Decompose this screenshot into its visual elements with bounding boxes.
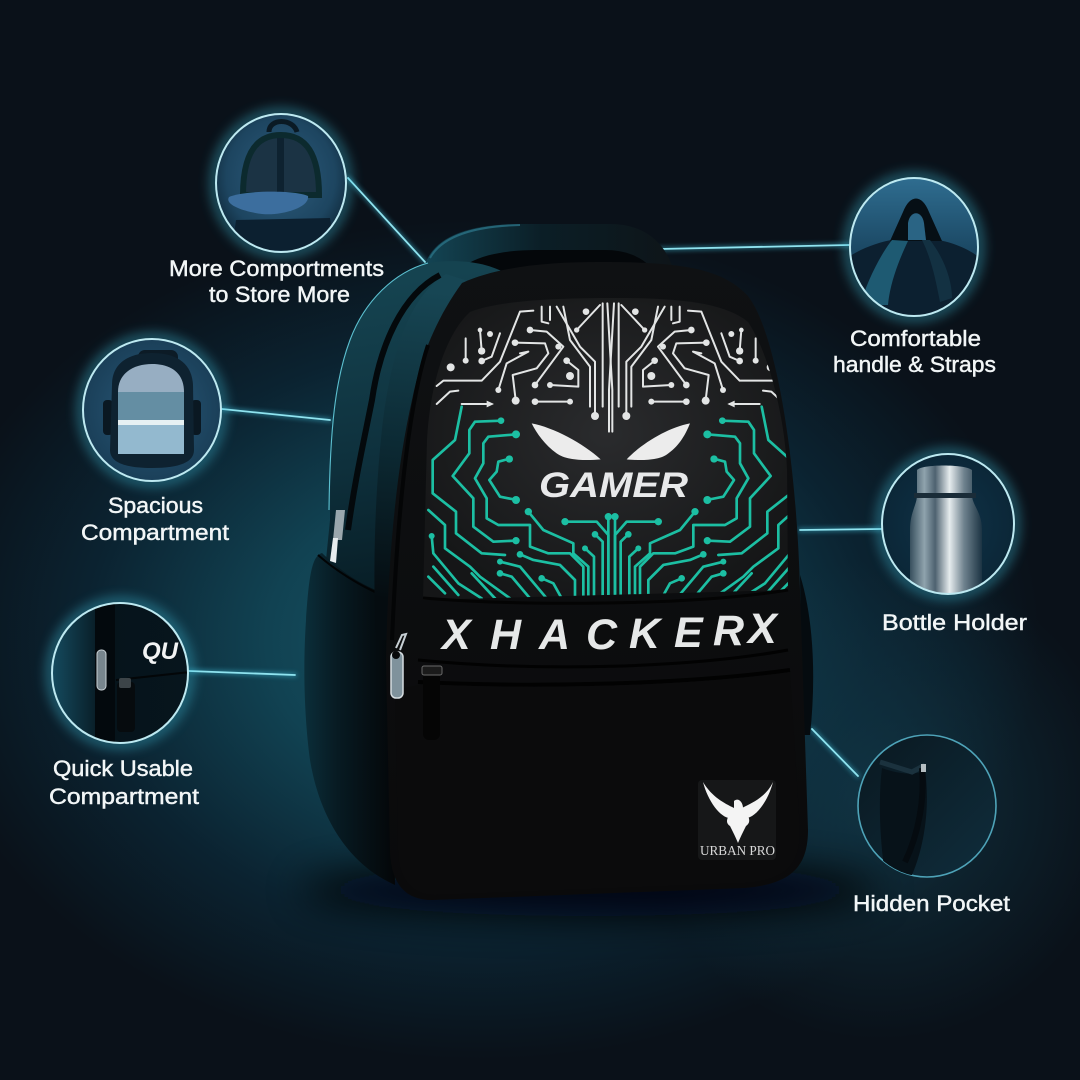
shell outline highlight — [329, 263, 428, 510]
front body — [386, 262, 808, 900]
label: spacious compartment — [81, 493, 230, 545]
logo wordmark: URBAN PRO — [700, 844, 775, 859]
circle: more compartments — [215, 113, 347, 253]
brand strip seam — [423, 590, 788, 603]
zipper seam — [418, 650, 790, 685]
circle: spacious compartment — [82, 338, 222, 482]
connector lines — [189, 178, 881, 776]
side shell — [322, 261, 520, 880]
label: bottle holder: Bottle Holder — [882, 610, 1028, 635]
label: quick usable compartment: Quick Usable — [53, 756, 193, 781]
zipper pull main — [391, 634, 406, 698]
GAMER text: GAMER — [539, 466, 689, 505]
front rim band — [374, 274, 480, 640]
mirrored traces right — [609, 303, 785, 432]
circuit traces — [428, 303, 795, 598]
shell groove — [348, 275, 440, 530]
left side pocket — [304, 553, 395, 885]
white traces left — [437, 303, 612, 432]
logo: Urban Pro — [698, 780, 776, 860]
label: more compartments: to Store More — [209, 282, 350, 307]
circuit panel — [423, 298, 788, 600]
circle: bottle holder — [881, 453, 1015, 600]
body seam — [392, 345, 428, 640]
label: comfortable handle: Comfortable — [850, 326, 981, 351]
inset wordmark: QU — [142, 638, 179, 665]
label: comfortable handle — [833, 326, 996, 377]
label: hidden pocket: Hidden Pocket — [853, 891, 1011, 916]
front pocket — [395, 672, 800, 895]
label: spacious compartment: Compartment — [81, 520, 230, 545]
circle: hidden pocket — [858, 735, 996, 877]
circle: quick usable compartment — [51, 602, 190, 744]
handle — [424, 224, 676, 290]
backpack — [300, 224, 880, 916]
label: more compartments — [169, 256, 384, 307]
label: quick usable compartment: Compartment — [49, 784, 200, 809]
right side pocket — [800, 575, 813, 735]
ground shadow — [300, 864, 880, 916]
teal traces left — [428, 407, 619, 598]
zipper pull upper — [330, 510, 345, 563]
label: spacious compartment: Spacious — [108, 493, 203, 518]
zipper tab — [422, 666, 442, 740]
label: more compartments: More Comportments — [169, 256, 384, 281]
alien eyes — [532, 423, 690, 460]
XHACKERX wordmark: XHACKERX — [440, 605, 779, 659]
label: quick usable compartment — [49, 756, 200, 809]
circle: comfortable handle — [849, 177, 980, 320]
label: comfortable handle: handle & Straps — [833, 352, 996, 377]
